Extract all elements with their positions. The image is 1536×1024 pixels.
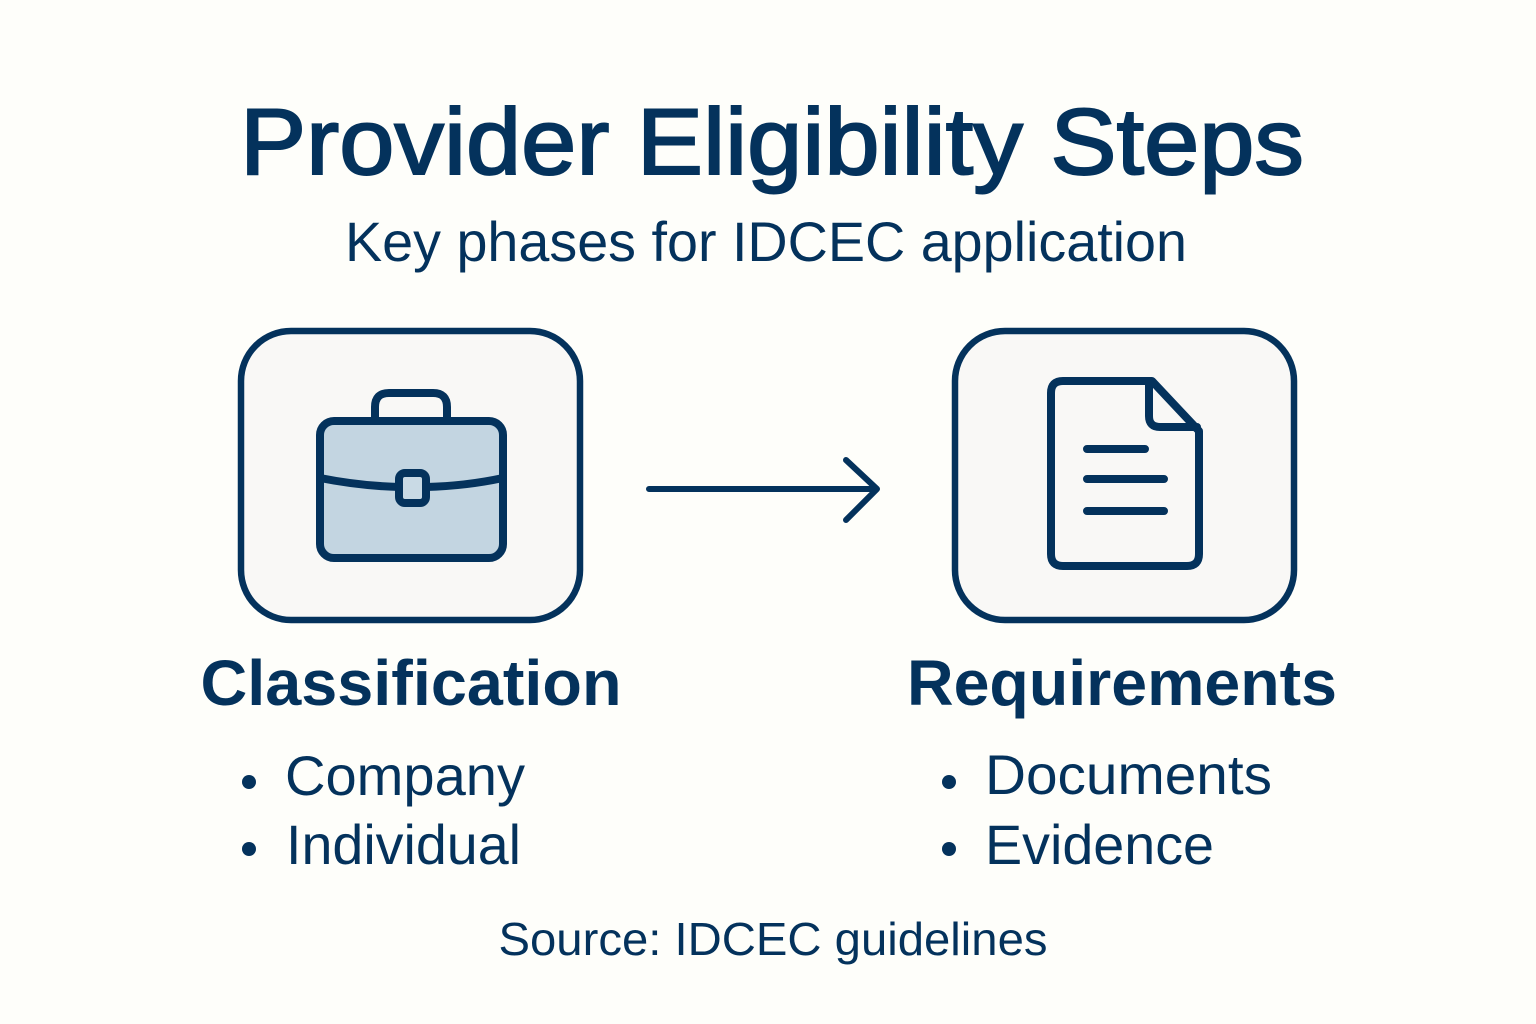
list: classification items: Company <box>285 744 525 807</box>
panel: requirements <box>907 331 1337 876</box>
title: Provider Eligibility Steps <box>240 89 1304 194</box>
icon: document <box>1051 381 1199 566</box>
icon card: briefcase <box>241 331 580 620</box>
list: classification items <box>242 744 525 876</box>
arrow <box>649 460 877 520</box>
source note: Source: IDCEC guidelines <box>498 913 1048 965</box>
list: classification items: Individual <box>286 813 521 876</box>
panel: classification <box>200 331 622 876</box>
heading: classification: Classification <box>200 647 622 719</box>
list: requirements items <box>942 743 1272 876</box>
icon: briefcase <box>320 393 503 558</box>
heading: requirements: Requirements <box>907 647 1337 719</box>
list: requirements items: Evidence <box>985 813 1214 876</box>
list: requirements items: Documents <box>985 743 1272 806</box>
subtitle: Key phases for IDCEC application <box>345 210 1187 273</box>
icon card: document <box>955 331 1294 620</box>
